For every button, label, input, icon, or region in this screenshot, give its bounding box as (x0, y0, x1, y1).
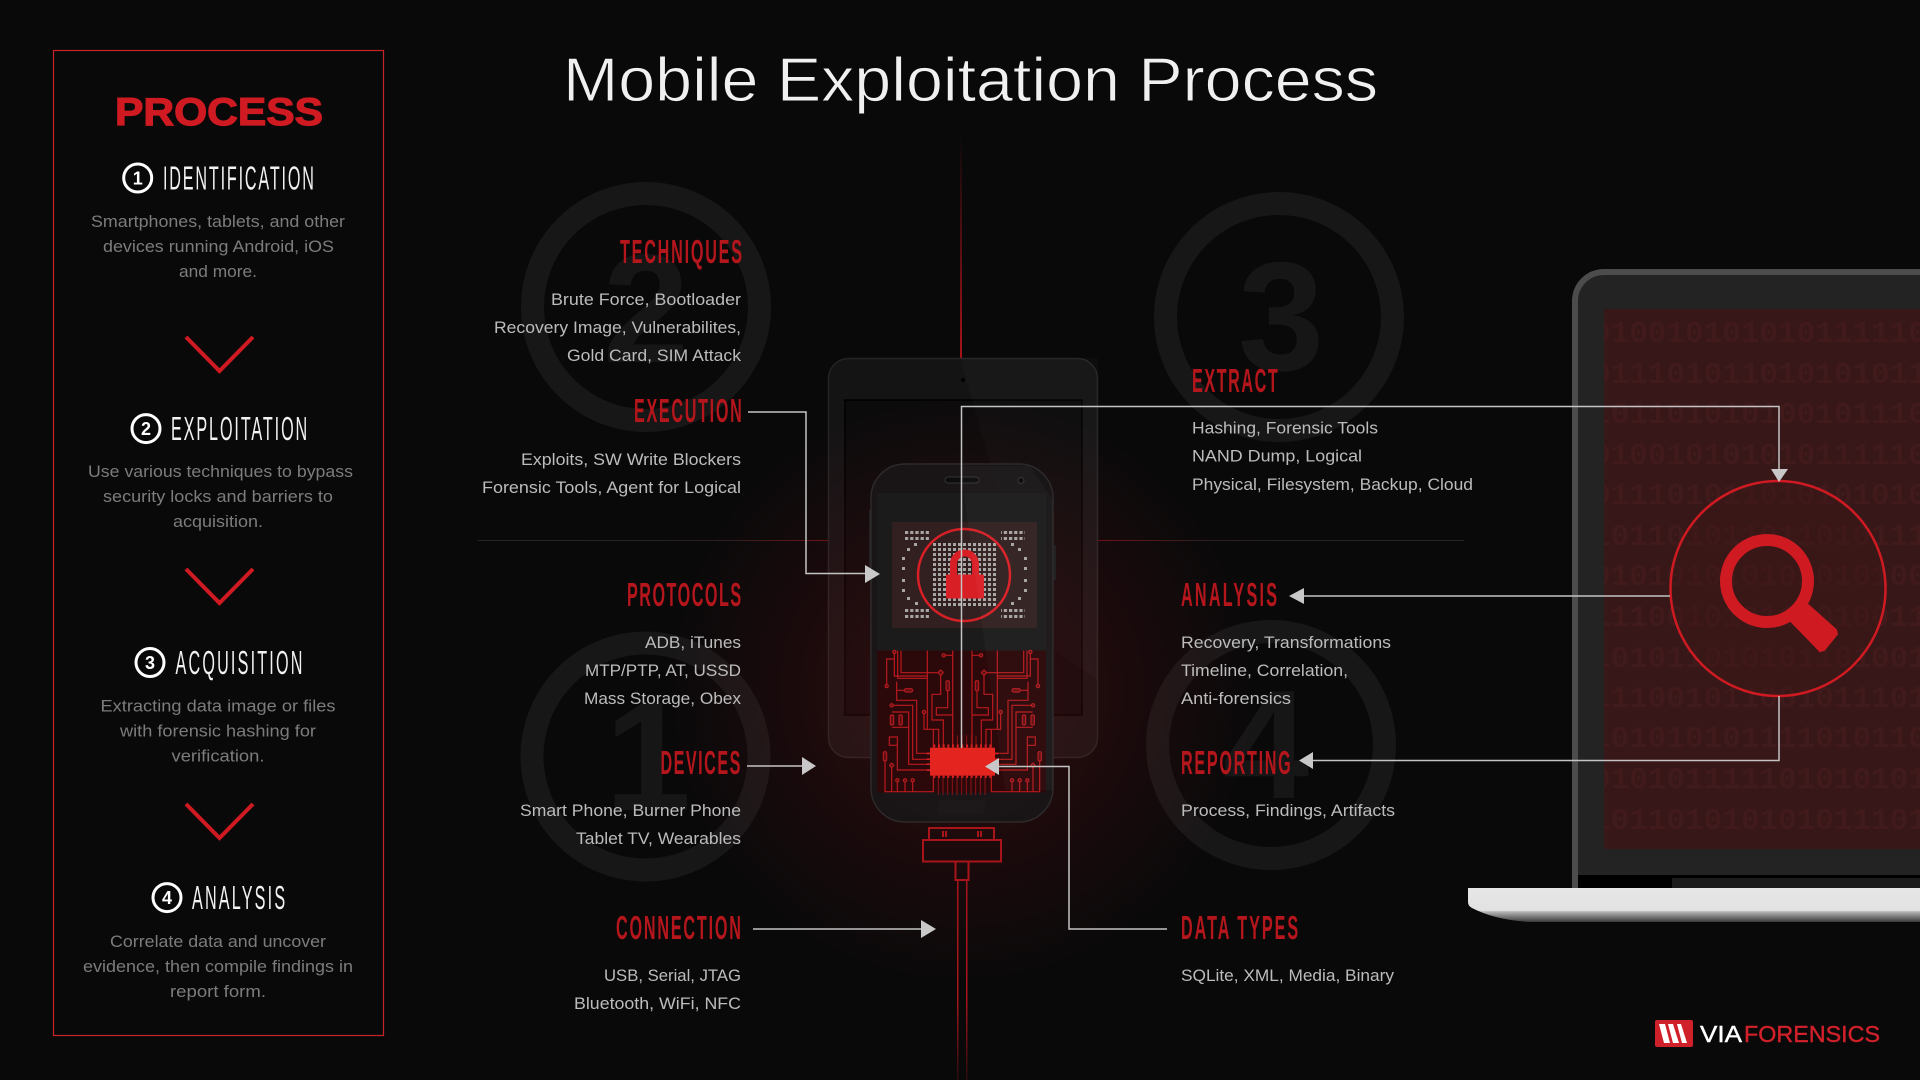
arrow: data types to chip (985, 758, 1167, 929)
phone glare (960, 466, 1053, 790)
text block: techniques: Recovery Image, Vulnerabilites, (494, 318, 741, 337)
arrow: devices (747, 757, 816, 775)
text block: protocols: Mass Storage, Obex (584, 689, 741, 708)
arrow: execution to phone (748, 412, 880, 583)
text block: analysis (1181, 576, 1391, 708)
text block: data types: DATA TYPES (1181, 909, 1298, 947)
arrow: chevron 2 (186, 569, 253, 603)
text block: connection: CONNECTION (616, 909, 741, 947)
text block: analysis: Anti-forensics (1181, 689, 1291, 708)
step 3 acquisition: ACQUISITION (176, 644, 302, 682)
arrow: magnifier to reporting (1299, 696, 1779, 769)
icon: laptop (1468, 272, 1920, 922)
icon: smartphone (869, 464, 1056, 822)
text block: execution: Forensic Tools, Agent for Logical (482, 478, 741, 497)
text block: execution: EXECUTION (634, 392, 742, 430)
step 3 acquisition: with forensic hashing for (119, 722, 316, 740)
step 2 exploitation: Use various techniques to bypass (88, 462, 353, 481)
step 3 acquisition: 3 (145, 653, 155, 673)
text block: devices (520, 744, 741, 848)
icon: padlock (946, 553, 984, 598)
step 2 exploitation: 2 (141, 419, 151, 439)
laptop base (1468, 888, 1920, 922)
step 2 exploitation: security locks and barriers to (103, 487, 333, 506)
step 1 identification (91, 159, 345, 281)
step 1 identification: and more. (179, 262, 257, 281)
text block: data types (1181, 909, 1394, 985)
panel heading: PROCESS (115, 91, 323, 134)
logo: viaForensics (1655, 1020, 1880, 1047)
text block: execution: Exploits, SW Write Blockers (521, 450, 741, 469)
step 1 identification: Smartphones, tablets, and other (91, 212, 345, 231)
text block: protocols: MTP/PTP, AT, USSD (585, 661, 741, 680)
watermark number 1: 1 (605, 670, 691, 843)
text block: extract: EXTRACT (1192, 362, 1278, 400)
arrow: connection (753, 920, 936, 938)
text block: execution (482, 392, 742, 497)
circuit board (883, 650, 1041, 795)
arrow: chevron 1 (186, 337, 253, 371)
text block: reporting: Process, Findings, Artifacts (1181, 801, 1395, 820)
step 3 acquisition: Extracting data image or files (100, 696, 336, 716)
icon: tablet (828, 358, 1098, 758)
step 4 analysis: 4 (162, 888, 172, 908)
text block: connection: Bluetooth, WiFi, NFC (574, 994, 741, 1013)
step 4 analysis: Correlate data and uncover (110, 932, 326, 951)
step 3 acquisition: verification. (172, 746, 264, 766)
step 3 acquisition (100, 644, 336, 766)
step 2 exploitation (88, 410, 353, 531)
title: Mobile Exploitation Process (563, 46, 1378, 115)
text block: extract: NAND Dump, Logical (1192, 446, 1362, 466)
text block: analysis: ANALYSIS (1181, 576, 1277, 614)
logo: viaForensics: VIA (1700, 1021, 1743, 1047)
text block: protocols (584, 576, 741, 708)
text block: techniques: Gold Card, SIM Attack (567, 346, 742, 365)
text block: extract: Physical, Filesystem, Backup, Cloud (1192, 475, 1473, 494)
lock screen panel (892, 522, 1037, 628)
watermark number 2 (532, 194, 760, 420)
centre vertical red line (960, 135, 962, 359)
text block: connection (574, 909, 741, 1013)
magnifier circle (1670, 481, 1886, 696)
step 1 identification: devices running Android, iOS (103, 237, 334, 256)
text block: devices: Tablet TV, Wearables (576, 829, 741, 848)
text block: devices: Smart Phone, Burner Phone (520, 801, 741, 820)
text block: techniques (494, 233, 742, 365)
icon: logo mark (1655, 1020, 1693, 1047)
text block: extract: Hashing, Forensic Tools (1192, 418, 1378, 438)
step 2 exploitation: acquisition. (173, 512, 263, 531)
watermark number 4 (1158, 632, 1384, 858)
red glow (662, 390, 1262, 990)
text block: techniques: TECHNIQUES (620, 233, 742, 271)
horizontal divider right (1098, 540, 1464, 541)
text block: reporting: REPORTING (1181, 744, 1291, 782)
text block: protocols: PROTOCOLS (627, 576, 741, 614)
step 2 exploitation: EXPLOITATION (171, 410, 307, 448)
arrow: magnifier to analysis (1289, 588, 1670, 604)
icon: magnifying glass (1726, 540, 1837, 651)
horizontal divider left (478, 540, 829, 541)
step 1 identification: IDENTIFICATION (163, 159, 314, 197)
icon: chip (927, 744, 998, 778)
step 4 analysis: evidence, then compile findings in (83, 957, 353, 976)
text block: devices: DEVICES (660, 744, 740, 782)
text block: data types: SQLite, XML, Media, Binary (1181, 966, 1394, 985)
step 4 analysis: report form. (170, 982, 266, 1001)
text block: connection: USB, Serial, JTAG (604, 966, 741, 985)
arrow: chip to magnifier (962, 406, 1788, 748)
text block: analysis: Recovery, Transformations (1181, 633, 1391, 652)
step 1 identification: 1 (133, 168, 143, 188)
text block: analysis: Timeline, Correlation, (1181, 661, 1348, 680)
text block: reporting (1181, 744, 1395, 820)
text block: techniques: Brute Force, Bootloader (551, 290, 741, 309)
text block: extract (1192, 362, 1473, 494)
panel: process (54, 50, 384, 1036)
laptop screen with binary text (1592, 309, 1920, 849)
watermark number 2: 2 (603, 222, 689, 395)
text block: protocols: ADB, iTunes (645, 633, 741, 652)
watermark number 3: 3 (1238, 230, 1324, 403)
icon: dock connector and cable (923, 828, 1001, 1080)
logo: viaForensics: FORENSICS (1744, 1021, 1880, 1047)
step 4 analysis: ANALYSIS (192, 879, 285, 917)
step 4 analysis (83, 879, 353, 1001)
watermark number 1 (532, 643, 759, 870)
watermark number 4: 4 (1223, 658, 1309, 831)
arrow: chevron 3 (186, 804, 253, 838)
watermark number 3 (1166, 204, 1392, 430)
